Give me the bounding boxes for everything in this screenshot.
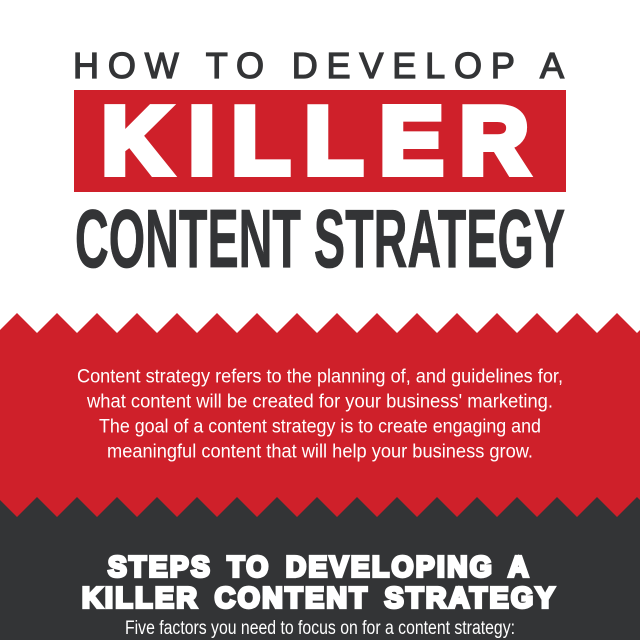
panel: red definition band [0, 313, 640, 520]
definition text [77, 366, 563, 462]
heading: steps to developing: KILLER CONTENT STRATEGY [82, 582, 557, 614]
heading: steps to developing [82, 552, 557, 614]
definition text: The goal of a content strategy is to create engaging and [99, 416, 541, 438]
definition text: meaningful content that will help your business grow. [107, 442, 533, 462]
title banner: killer: KILLER [102, 88, 529, 194]
title line: how to develop a: HOW TO DEVELOP A [73, 45, 564, 86]
definition text: Content strategy refers to the planning of, and guidelines for, [77, 366, 563, 388]
panel: dark steps section [0, 497, 640, 640]
subheading: five factors: Five factors you need to focus on for a content strategy: [125, 618, 515, 639]
heading: steps to developing: STEPS TO DEVELOPING A [108, 552, 531, 584]
definition text: what content will be created for your business' marketing. [86, 392, 553, 412]
